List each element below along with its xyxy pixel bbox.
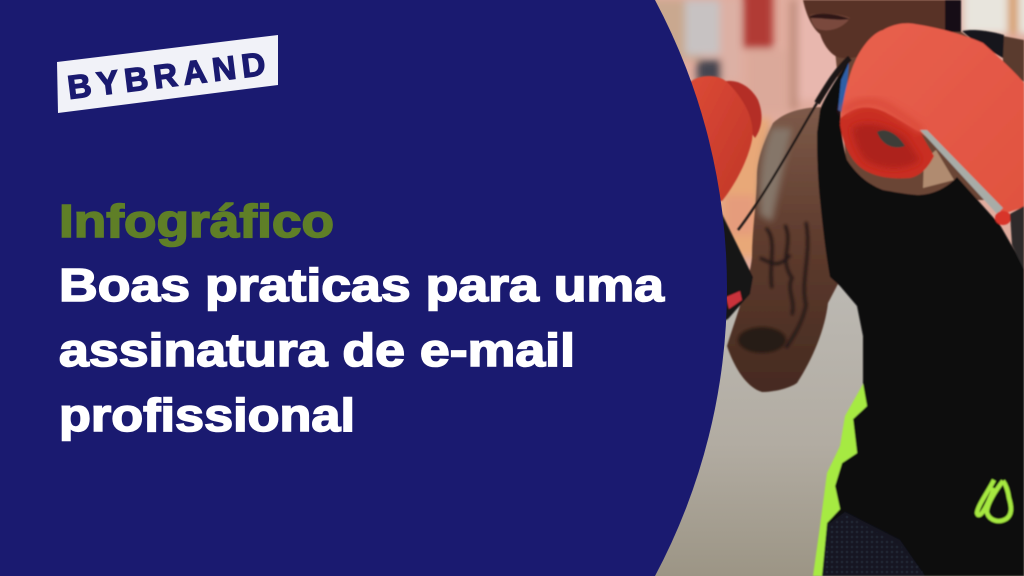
logo: BYBRAND <box>57 35 278 113</box>
logo text: BYBRAND <box>65 45 267 106</box>
photo: gym background <box>640 0 1024 576</box>
face <box>803 0 945 58</box>
right shoulder <box>1003 36 1024 82</box>
arm grey tattoo patch <box>760 128 792 222</box>
chest light patch <box>923 150 954 188</box>
shorts lower panel <box>822 512 925 576</box>
black shorts <box>822 406 1024 576</box>
right glove <box>840 23 1024 214</box>
glove center <box>877 130 905 147</box>
title: profissional <box>59 389 355 441</box>
wrap logo <box>726 291 742 309</box>
heading: Infográfico: Infográfico <box>59 195 334 247</box>
left glove inner lobe <box>722 81 762 138</box>
left glove <box>690 76 753 201</box>
elbow tattoo shade <box>738 327 786 353</box>
lips <box>810 14 850 30</box>
glove palm <box>840 107 934 178</box>
right wrist <box>1010 206 1024 270</box>
title <box>59 259 664 441</box>
shoulder strap <box>962 30 1004 58</box>
title: assinatura de e-mail <box>59 324 575 376</box>
heading block <box>59 195 664 441</box>
wrist wrap <box>722 214 753 322</box>
navy panel <box>0 0 727 576</box>
glove palm shade <box>852 124 920 168</box>
title: Boas praticas para uma <box>59 259 664 311</box>
glove palm top blend <box>843 102 922 131</box>
black tank top <box>817 60 1024 576</box>
blue inner strap <box>838 62 849 112</box>
arm <box>727 107 840 392</box>
mesh dots <box>824 515 925 576</box>
lip line <box>810 14 850 20</box>
neon cord <box>977 480 1011 521</box>
hair braid left <box>817 58 850 103</box>
hair braid right <box>945 0 961 32</box>
arm tattoo <box>760 222 808 348</box>
glove cuff tip <box>995 211 1011 225</box>
braid tail <box>738 103 817 230</box>
neck and chest <box>835 20 1000 200</box>
photo: boxer figure <box>690 0 1024 576</box>
glove cuff strip <box>920 130 1003 214</box>
logo background <box>57 35 278 113</box>
neon waistband <box>813 384 867 576</box>
